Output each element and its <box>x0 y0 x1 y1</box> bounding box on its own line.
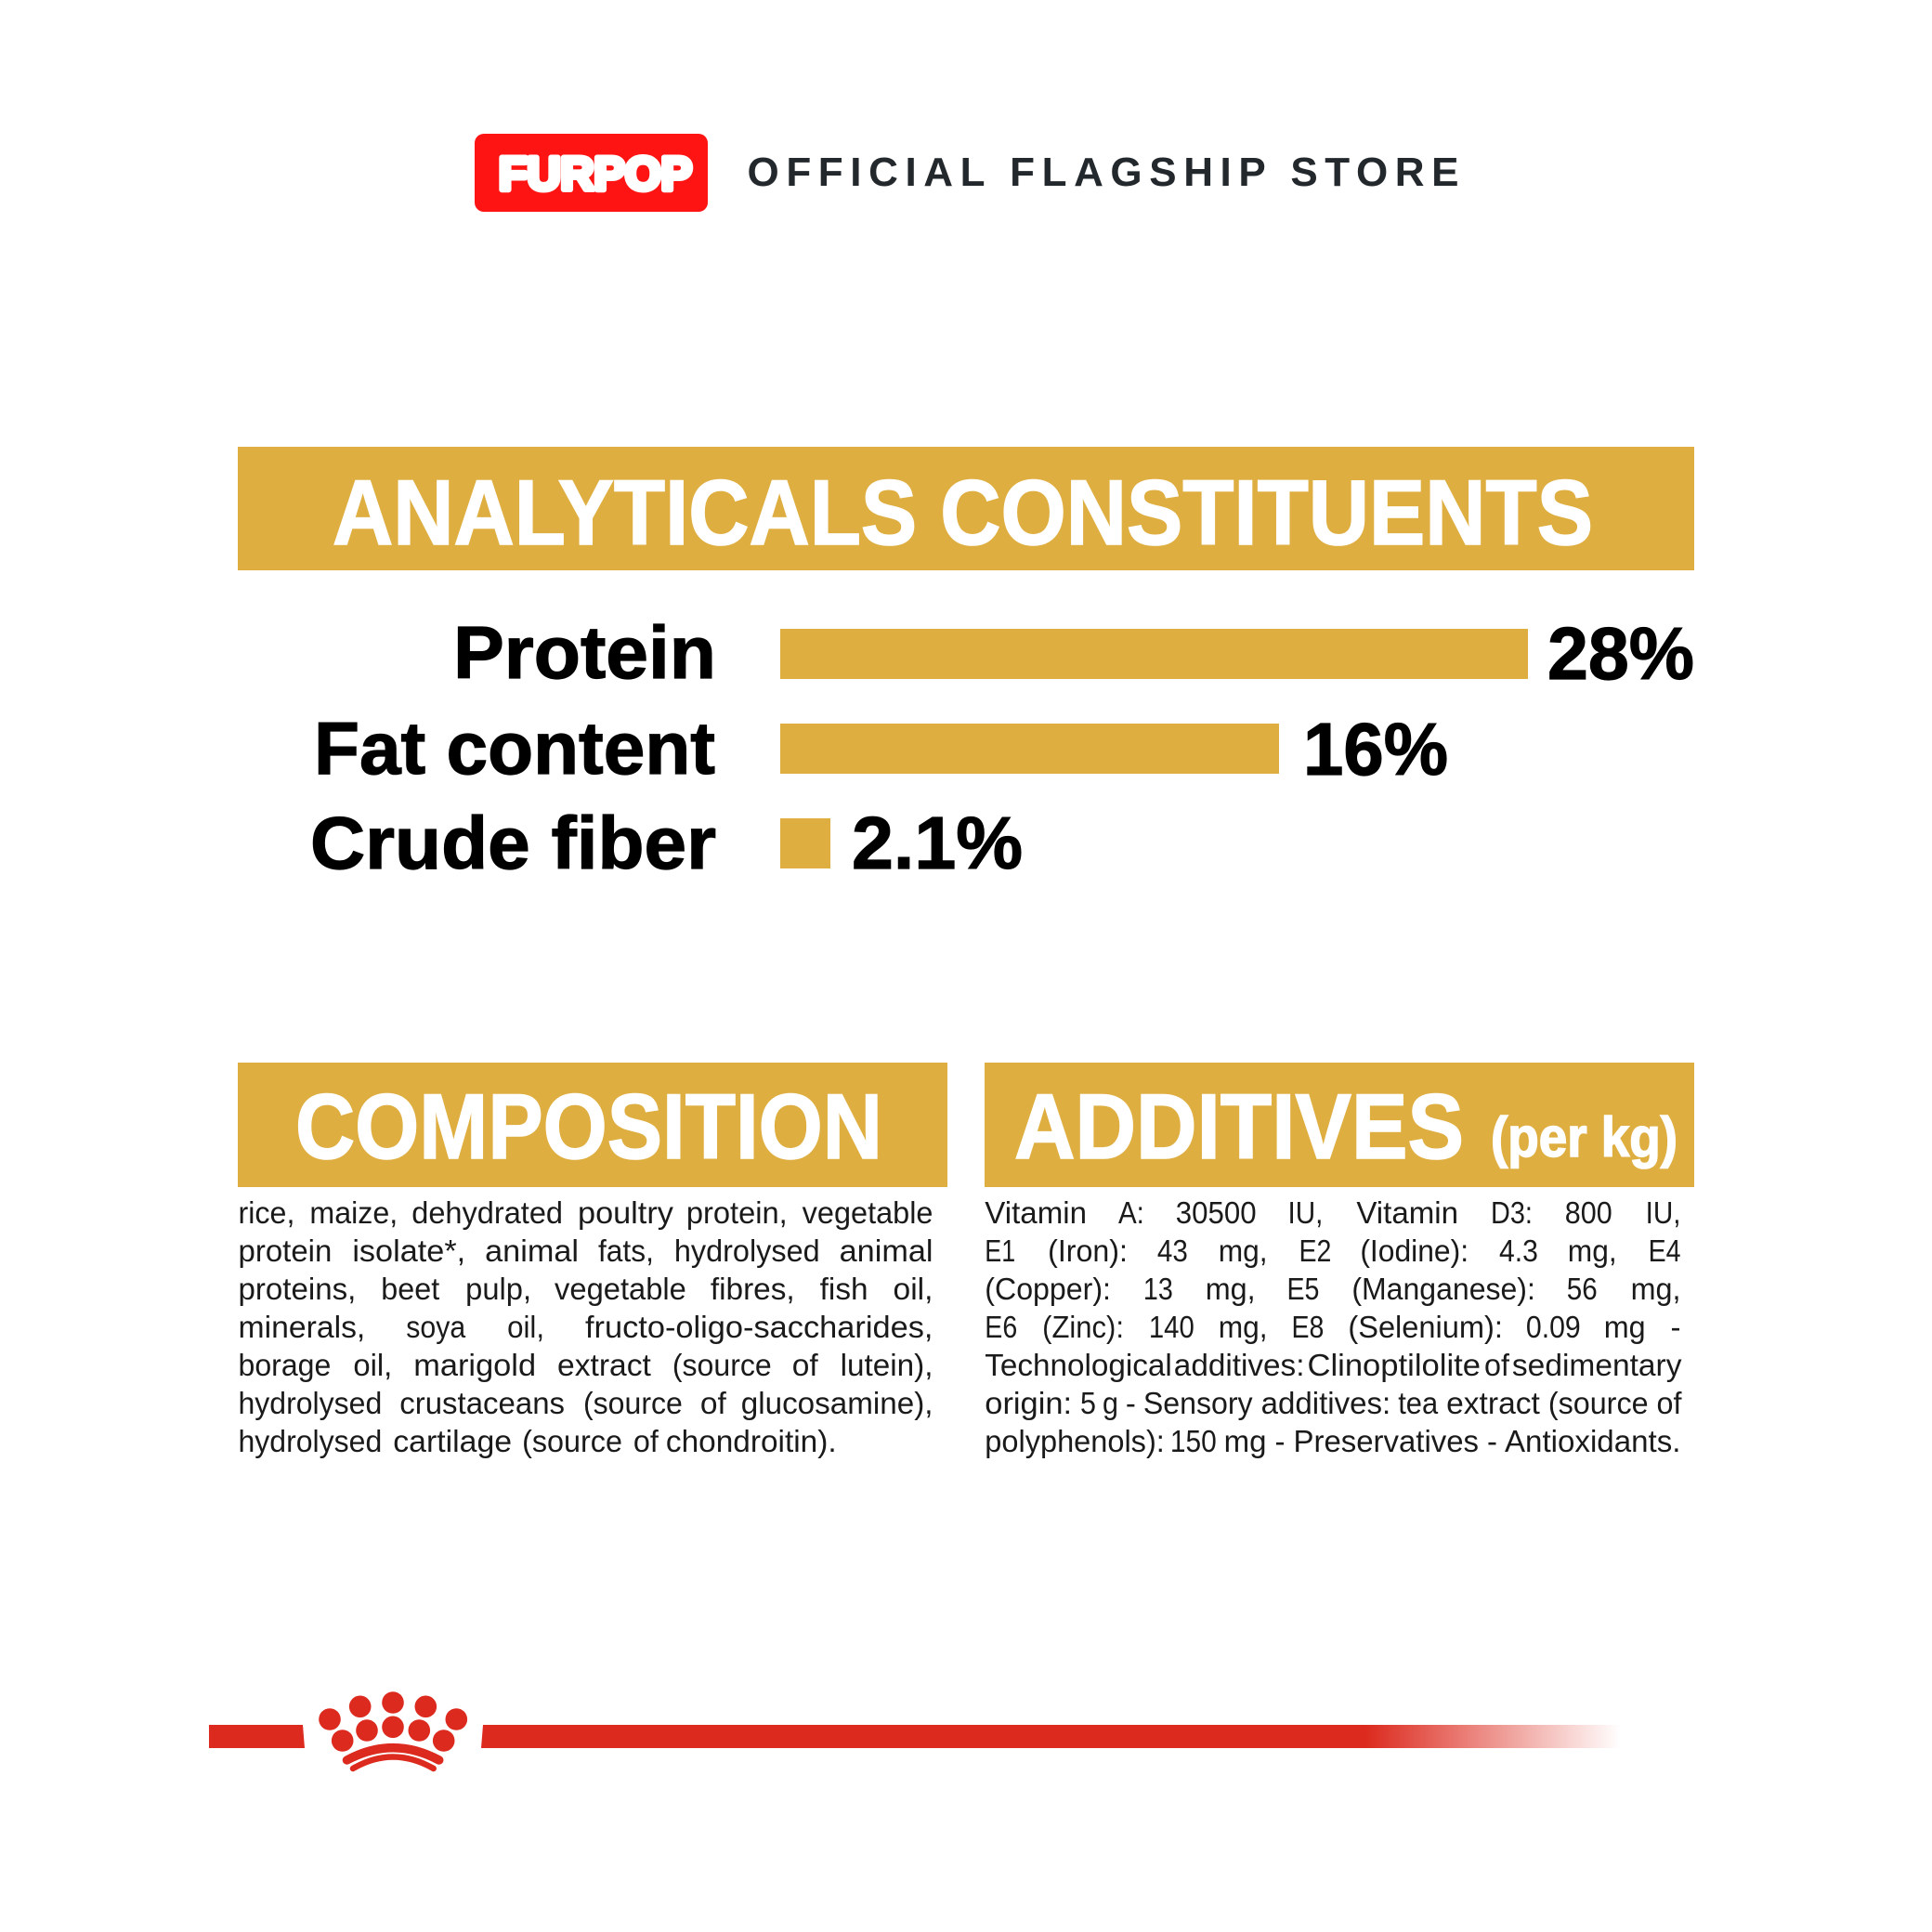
additives text: tea <box>1398 1386 1439 1420</box>
bar row: fat content 16%: Fat content <box>314 707 715 790</box>
additives text: (Selenium): <box>1348 1310 1503 1344</box>
composition text: hydrolysed <box>239 1386 382 1420</box>
additives text: 13 <box>1143 1272 1173 1306</box>
composition text: of <box>633 1424 659 1458</box>
bar row: crude fiber 2.1%: 2.1% <box>852 802 1023 884</box>
additives text: Antioxidants. <box>1505 1424 1681 1458</box>
additives text: IU, <box>1288 1195 1323 1230</box>
logo: FURPOP badge <box>475 134 708 212</box>
heading banner: additives per kg <box>985 1063 1694 1187</box>
composition text: protein, <box>686 1195 788 1230</box>
additives text: extract <box>1446 1386 1540 1420</box>
store name text: OFFICIAL FLAGSHIP STORE <box>747 150 1458 195</box>
composition text: chondroitin). <box>666 1424 837 1458</box>
composition text: extract <box>557 1348 651 1382</box>
additives text: E2 <box>1299 1234 1331 1268</box>
additives text: of <box>1657 1386 1682 1420</box>
composition text: poultry <box>578 1195 673 1230</box>
heading banner: composition: COMPOSITION <box>295 1075 882 1178</box>
additives text: additives: <box>1261 1386 1390 1420</box>
additives text: E6 <box>985 1310 1017 1344</box>
composition text: lutein), <box>841 1348 933 1382</box>
heading banner: additives per kg: ADDITIVES <box>1014 1075 1464 1178</box>
additives text: D3: <box>1491 1195 1533 1230</box>
additives text: 800 <box>1565 1195 1612 1230</box>
heading banner: additives per kg: (per kg) <box>1491 1106 1677 1168</box>
composition text: oil, <box>894 1272 933 1306</box>
additives text: E4 <box>1649 1234 1681 1268</box>
additives text: (Manganese): <box>1351 1272 1535 1306</box>
additives text: (Zinc): <box>1042 1310 1124 1344</box>
bar row: crude fiber 2.1% <box>310 802 1023 884</box>
icon: crown logo <box>319 1691 467 1769</box>
composition text: dehydrated <box>411 1195 563 1230</box>
composition text: fructo-oligo-saccharides, <box>585 1310 933 1344</box>
panel: composition <box>238 1063 947 1458</box>
additives text <box>985 1195 1682 1458</box>
composition text: animal <box>840 1234 933 1268</box>
additives text: 140 <box>1149 1310 1194 1344</box>
footer brand rule with crown <box>209 1691 1621 1769</box>
additives text: (Copper): <box>985 1272 1111 1306</box>
composition text: of <box>700 1386 727 1420</box>
bar row: protein 28%: 28% <box>1547 612 1694 695</box>
panel: additives <box>985 1063 1694 1458</box>
additives text: of <box>1484 1348 1510 1382</box>
composition text: rice, <box>239 1195 294 1230</box>
composition text: (source <box>583 1386 683 1420</box>
additives text: mg <box>1224 1424 1267 1458</box>
additives text: E1 <box>985 1234 1015 1268</box>
composition text: proteins, <box>239 1272 356 1306</box>
composition text: vegetable <box>555 1272 686 1306</box>
composition text <box>239 1195 933 1458</box>
composition text: animal <box>485 1234 579 1268</box>
panel: analyticals constituents <box>238 447 1694 884</box>
additives text: mg, <box>1219 1234 1268 1268</box>
additives text: Clinoptilolite <box>1307 1348 1481 1382</box>
composition text: protein <box>239 1234 332 1268</box>
additives text: 30500 <box>1176 1195 1257 1230</box>
additives text: g <box>1103 1386 1118 1420</box>
additives text: (Iron): <box>1048 1234 1128 1268</box>
additives text: additives: <box>1174 1348 1304 1382</box>
heading banner: analyticals constituents: ANALYTICALS CONSTITUENTS <box>333 461 1593 564</box>
additives text: origin: <box>985 1386 1072 1420</box>
store header <box>475 134 1458 212</box>
composition text: maize, <box>309 1195 398 1230</box>
composition text: fats, <box>598 1234 654 1268</box>
additives text: E5 <box>1287 1272 1319 1306</box>
additives text: A: <box>1118 1195 1144 1230</box>
logo: FURPOP badge: FURPOP <box>499 148 692 200</box>
composition text: fibres, <box>711 1272 795 1306</box>
composition text: crustaceans <box>399 1386 565 1420</box>
additives text: mg, <box>1206 1272 1256 1306</box>
additives text: 4.3 <box>1499 1234 1538 1268</box>
red rule right fading out <box>481 1725 1621 1748</box>
composition text: pulp, <box>465 1272 531 1306</box>
additives text: mg, <box>1631 1272 1681 1306</box>
bar row: protein 28%: Protein <box>453 611 716 694</box>
additives text: 5 <box>1080 1386 1096 1420</box>
bar row: protein 28% <box>453 611 1694 695</box>
composition text: minerals, <box>239 1310 365 1344</box>
composition text: oil, <box>507 1310 544 1344</box>
composition text: (source <box>672 1348 772 1382</box>
red rule left <box>209 1725 305 1748</box>
composition text: vegetable <box>803 1195 933 1230</box>
additives text: Vitamin <box>985 1195 1087 1230</box>
additives text: (source <box>1548 1386 1649 1420</box>
composition text: borage <box>239 1348 331 1382</box>
additives text: 0.09 <box>1526 1310 1581 1344</box>
additives text: Sensory <box>1143 1386 1253 1420</box>
additives text: 56 <box>1567 1272 1598 1306</box>
bar row: fat content 16% <box>314 707 1448 790</box>
composition text: oil, <box>353 1348 392 1382</box>
composition text: cartilage <box>393 1424 512 1458</box>
additives text: mg, <box>1219 1310 1268 1344</box>
composition text: glucosamine), <box>741 1386 933 1420</box>
composition text: marigold <box>413 1348 536 1382</box>
composition text: hydrolysed <box>239 1424 382 1458</box>
additives text: 43 <box>1157 1234 1188 1268</box>
composition text: beet <box>381 1272 439 1306</box>
composition text: (source <box>522 1424 622 1458</box>
additives text: 150 <box>1170 1424 1217 1458</box>
additives text: - <box>1487 1424 1497 1458</box>
composition text: soya <box>406 1310 466 1344</box>
additives text: sedimentary <box>1512 1348 1682 1382</box>
composition text: isolate*, <box>352 1234 465 1268</box>
additives text: E8 <box>1292 1310 1324 1344</box>
bar row: crude fiber 2.1%: Crude fiber <box>310 802 716 884</box>
additives text: Vitamin <box>1356 1195 1458 1230</box>
additives text: Technological <box>985 1348 1172 1382</box>
additives text: mg, <box>1568 1234 1617 1268</box>
additives text: mg <box>1604 1310 1646 1344</box>
composition text: of <box>792 1348 819 1382</box>
bar row: fat content 16%: 16% <box>1303 708 1448 790</box>
additives text: polyphenols): <box>985 1424 1165 1458</box>
composition text: fish <box>820 1272 868 1306</box>
additives text: - <box>1275 1424 1286 1458</box>
additives text: Preservatives <box>1294 1424 1479 1458</box>
additives text: (Iodine): <box>1360 1234 1469 1268</box>
additives text: IU, <box>1646 1195 1681 1230</box>
additives text: - <box>1126 1386 1136 1420</box>
composition text: hydrolysed <box>674 1234 820 1268</box>
additives text: - <box>1671 1310 1681 1344</box>
